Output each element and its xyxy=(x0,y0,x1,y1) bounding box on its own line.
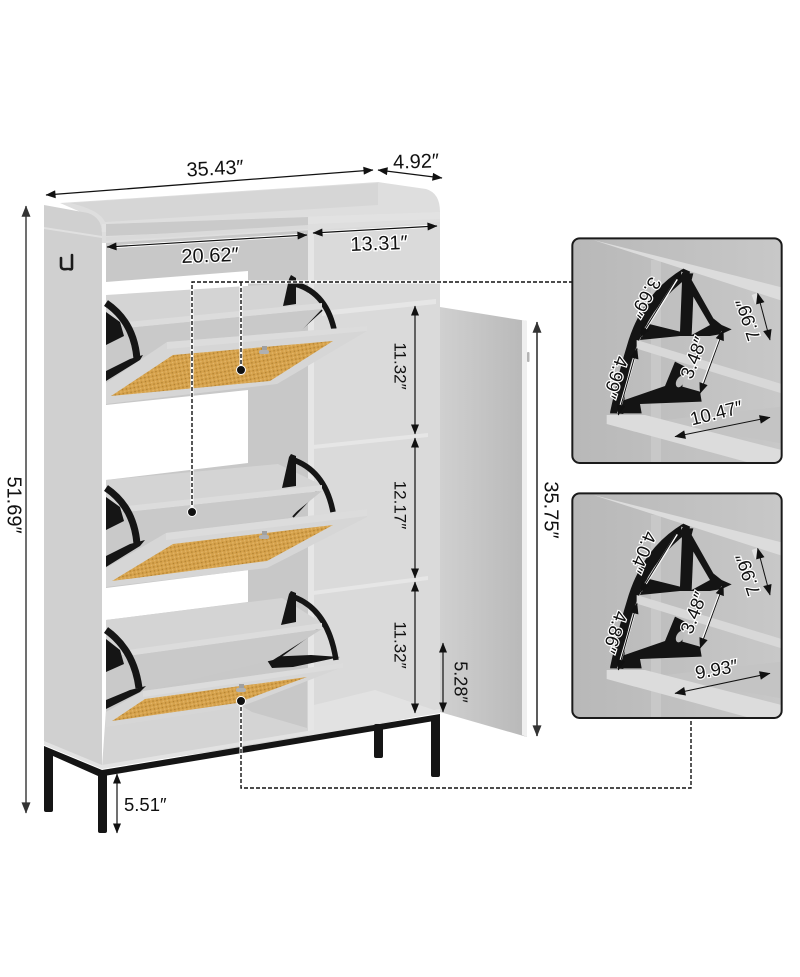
labels: 9.93″ xyxy=(693,655,740,683)
dimension: overall width: 35.43″ xyxy=(186,157,244,181)
right leg xyxy=(431,716,440,777)
inner shelf xyxy=(127,485,322,512)
dimension: compartment heights xyxy=(391,306,470,713)
top shelf xyxy=(593,495,782,556)
inner shelf xyxy=(128,623,322,656)
dimension: door height: 35.75″ xyxy=(540,481,562,539)
labels: 3.48″ xyxy=(676,589,711,637)
dashed strokes xyxy=(192,282,691,788)
dimension: interior widths xyxy=(107,226,437,268)
labels xyxy=(599,274,764,429)
top front lip xyxy=(102,212,440,232)
drawer 2 xyxy=(106,454,367,587)
callout line halo xyxy=(192,282,573,770)
panel border xyxy=(572,238,782,463)
labels: 3.48″ xyxy=(676,334,711,382)
knob xyxy=(259,346,269,354)
label 12.17: 12.17″ xyxy=(391,481,410,529)
metal frame xyxy=(44,714,440,833)
open door xyxy=(440,307,530,737)
back opening white cutouts xyxy=(106,271,248,620)
cabinet left interior xyxy=(106,222,308,765)
inset panel: upper drawer detail xyxy=(572,238,782,463)
cabinet illustration xyxy=(44,182,530,833)
rattan xyxy=(112,525,333,581)
inset panel: lower drawer detail xyxy=(572,493,782,718)
side hook xyxy=(61,255,72,269)
middle shelf xyxy=(637,340,782,393)
compartment floor xyxy=(314,690,440,735)
label 5.28: 5.28″ xyxy=(450,661,470,703)
arrows xyxy=(618,272,722,413)
cabinet right compartment xyxy=(308,218,440,738)
back panel xyxy=(106,283,322,326)
label 11.32 lower: 11.32″ xyxy=(391,621,410,669)
knob xyxy=(752,293,762,304)
door panel xyxy=(106,509,367,587)
top back rail xyxy=(70,183,378,222)
callout dots xyxy=(188,366,246,706)
bottom edge xyxy=(44,709,440,769)
left bracket xyxy=(106,303,143,381)
side panel seam xyxy=(44,227,102,238)
cabinet floor board xyxy=(102,680,308,767)
rattan xyxy=(112,677,307,721)
middle shelf xyxy=(637,595,782,648)
compartment shelves xyxy=(313,299,436,595)
right bracket xyxy=(283,275,334,330)
labels: 3.69″ xyxy=(626,274,666,322)
right bracket xyxy=(265,591,340,668)
back panel xyxy=(106,464,322,511)
left bracket xyxy=(106,488,145,567)
labels: 4.99″ xyxy=(599,353,632,401)
left bracket xyxy=(106,630,146,709)
label 11.32 upper: 11.32″ xyxy=(391,342,410,390)
labels: 7.99″ xyxy=(731,296,764,343)
dimension: leg height xyxy=(117,774,167,833)
door panel xyxy=(106,326,367,404)
bottom shelf xyxy=(607,670,782,718)
label 20.62: 20.62″ xyxy=(181,244,239,268)
side panel xyxy=(44,205,102,767)
bracket opening xyxy=(692,297,710,335)
floor glow xyxy=(665,662,782,698)
vertical divider xyxy=(651,515,661,718)
labels: 10.47″ xyxy=(688,396,745,429)
front left leg xyxy=(98,772,107,833)
drawer 1 xyxy=(106,275,367,404)
right bracket xyxy=(282,454,333,517)
dimension: depth: 4.92″ xyxy=(393,150,439,174)
labels: 4.04″ xyxy=(625,528,661,576)
dimension: depth xyxy=(378,150,442,178)
labels: 7.99″ xyxy=(731,551,764,598)
floor glow xyxy=(665,407,782,443)
bottom shelf xyxy=(607,415,782,463)
labels xyxy=(598,528,764,683)
bracket opening xyxy=(692,552,710,590)
vertical divider xyxy=(651,260,661,463)
top shelf xyxy=(593,240,782,301)
panel border xyxy=(572,493,782,718)
dimension: overall width xyxy=(46,157,373,195)
knob xyxy=(259,531,269,539)
inner shelf xyxy=(127,303,322,328)
knob xyxy=(752,548,762,559)
door edge xyxy=(522,320,527,737)
divider column xyxy=(308,226,314,738)
middle leg xyxy=(374,724,383,758)
floor recess xyxy=(240,675,307,728)
back panel xyxy=(106,598,322,655)
arrows xyxy=(618,527,722,668)
drawer 3 xyxy=(102,591,343,767)
back left leg xyxy=(44,750,53,812)
label 13.31: 13.31″ xyxy=(350,232,408,256)
bracket xyxy=(610,269,732,414)
door panel xyxy=(106,663,343,727)
cabinet top surface xyxy=(60,182,440,243)
dimension: leg height: 5.51″ xyxy=(124,794,167,815)
dimension: overall height: 51.69″ xyxy=(3,476,25,534)
knob xyxy=(236,684,246,692)
rattan xyxy=(111,341,333,396)
left top band xyxy=(106,217,308,236)
labels: 4.86″ xyxy=(598,608,632,656)
dashed callout lines xyxy=(192,282,691,788)
bracket xyxy=(610,524,732,669)
